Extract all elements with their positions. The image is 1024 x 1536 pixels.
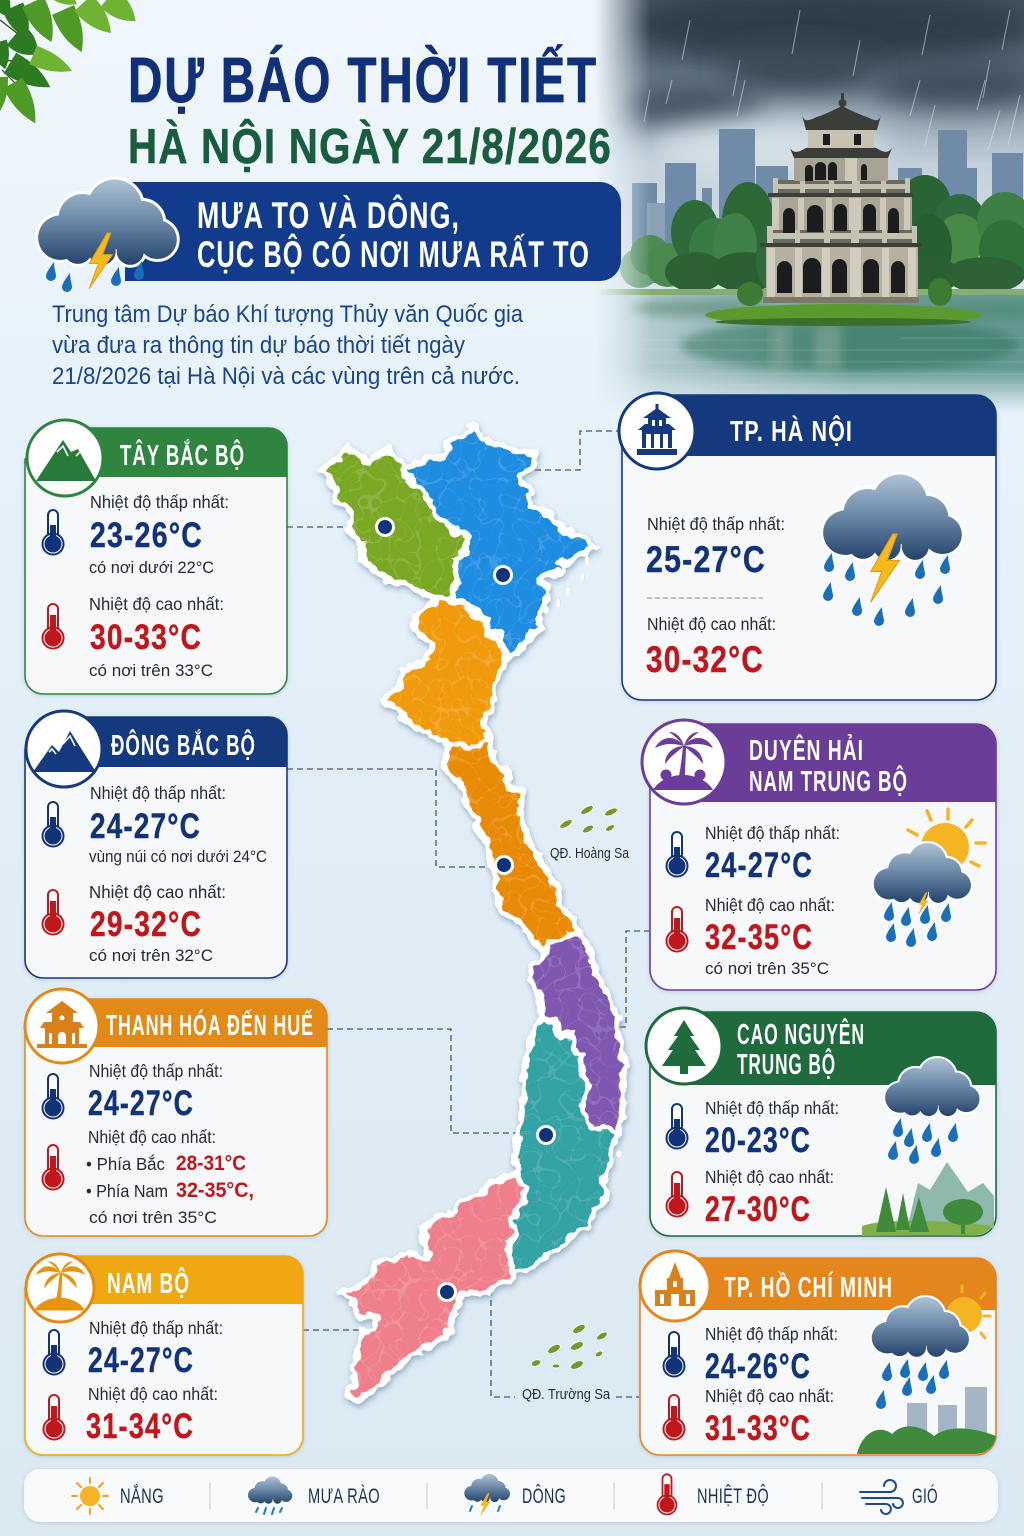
icon: palm island: [642, 720, 726, 804]
illustration: rain over highland forest: [862, 1058, 994, 1236]
low temperature: [666, 823, 840, 885]
high temperature: 32-35°C: [705, 918, 813, 957]
panel: Nam Bộ: [25, 1254, 303, 1455]
high temperature: Nhiệt độ cao nhất:: [705, 895, 835, 915]
map of Vietnam: [320, 423, 625, 1402]
panel: TP. Hồ Chí Minh: [640, 1251, 996, 1455]
high temperature: 31-34°C: [86, 1407, 194, 1446]
legend item: thunderstorm: DÔNG: [522, 1485, 566, 1508]
high temperature: 27-30°C: [705, 1190, 811, 1229]
map region: Cao nguyên Trung Bộ: [510, 1017, 617, 1273]
illustration: sun, rain cloud and city: [857, 1286, 996, 1454]
high temperature: Nhiệt độ cao nhất:: [647, 614, 776, 634]
low temperature: Nhiệt độ thấp nhất:: [89, 1061, 223, 1081]
low temperature: 24-27°C: [88, 1084, 194, 1123]
low temperature: 20-23°C: [705, 1121, 811, 1160]
legend item: showers: [248, 1476, 380, 1514]
islands: Hoàng Sa: [550, 804, 630, 862]
low temperature: [42, 1061, 223, 1123]
panel: Đông Bắc Bộ: [25, 711, 287, 978]
low temperature: 24-26°C: [705, 1347, 811, 1386]
heading: [737, 1017, 865, 1081]
heading: ĐÔNG BẮC BỘ: [111, 728, 256, 762]
high temperature: 30-33°C: [90, 618, 202, 657]
title: DỰ BÁO THỜI TIẾT: [128, 44, 598, 116]
high temperature: Nhiệt độ cao nhất:: [89, 594, 224, 614]
low temperature: Nhiệt độ thấp nhất:: [705, 1324, 838, 1344]
photo: Hoan Kiem lake and Turtle Tower under storm clouds: [598, 0, 1024, 410]
high temperature: [44, 1384, 218, 1446]
high temperature: Nhiệt độ cao nhất:: [89, 882, 226, 902]
high temperature: [666, 1167, 834, 1229]
low temperature: [646, 514, 785, 580]
high temperature: [42, 882, 226, 965]
low temperature: 23-26°C: [90, 516, 203, 555]
low temperature: 24-27°C: [88, 1341, 194, 1380]
low temperature: Nhiệt độ thấp nhất:: [90, 783, 226, 803]
island: [705, 278, 981, 326]
high temperature: [666, 895, 835, 978]
low temperature: [44, 1318, 223, 1380]
high temperature: Nhiệt độ cao nhất:: [88, 1127, 216, 1147]
low temperature: có nơi dưới 22°C: [89, 558, 214, 577]
intro text: [52, 301, 524, 390]
icon: Turtle Tower: [619, 393, 695, 469]
islands: Hoàng Sa: QĐ. Hoàng Sa: [550, 845, 630, 862]
high temperature: Nhiệt độ cao nhất:: [705, 1386, 834, 1406]
intro text: 21/8/2026 tại Hà Nội và các vùng trên cả nước.: [52, 363, 520, 390]
heading: CAO NGUYÊN: [737, 1017, 865, 1051]
low temperature: 24-27°C: [705, 846, 813, 885]
high temperature: có nơi trên 35°C: [89, 1208, 217, 1227]
connector lines: [287, 431, 650, 1397]
legend item: thunderstorm: [464, 1474, 566, 1516]
subtitle: HÀ NỘI NGÀY 21/8/2026: [128, 119, 612, 174]
high temperature: 29-32°C: [90, 905, 202, 944]
map region: Tây Bắc: [320, 448, 467, 603]
panel: Duyên hải Nam Trung Bộ: [642, 720, 996, 990]
icon: navy mountains: [26, 711, 102, 787]
low temperature: vùng núi có nơi dưới 24°C: [89, 847, 267, 866]
icon: citadel gate: [25, 989, 99, 1063]
legend item: sun: NẮNG: [120, 1484, 164, 1508]
heading: TÂY BẮC BỘ: [120, 438, 245, 472]
intro text: Trung tâm Dự báo Khí tượng Thủy văn Quốc gia: [52, 301, 524, 328]
icon: palm tree: [26, 1254, 94, 1322]
high temperature: có nơi trên 32°C: [89, 946, 213, 965]
map region: Hà Tĩnh đến Huế: [443, 741, 577, 950]
low temperature: [42, 492, 229, 577]
low temperature: Nhiệt độ thấp nhất:: [90, 492, 229, 512]
high temperature: • Phía Nam: [86, 1181, 168, 1201]
map region: Nam Bộ: [340, 1173, 527, 1402]
legend: [24, 1469, 998, 1522]
high temperature: 30-32°C: [646, 639, 764, 680]
legend item: sun: [72, 1478, 164, 1514]
high temperature: [42, 594, 224, 680]
panel: Tây Bắc Bộ: [25, 420, 287, 694]
heading: DUYÊN HẢI: [749, 733, 864, 767]
high temperature: có nơi trên 33°C: [89, 661, 213, 680]
map region: Duyên hải Nam Trung Bộ: [530, 932, 625, 1132]
map region: Đông Bắc: [403, 423, 597, 660]
icon: storm cloud: [38, 180, 177, 292]
decorative leaves, top left: [0, 0, 143, 129]
low temperature: 24-27°C: [90, 807, 201, 846]
heading: [749, 733, 908, 798]
headline banner: CỤC BỘ CÓ NƠI MƯA RẤT TO: [197, 233, 590, 275]
low temperature: Nhiệt độ thấp nhất:: [705, 823, 840, 843]
panel: TP. Hà Nội: [619, 393, 996, 700]
legend item: showers: MƯA RÀO: [308, 1485, 380, 1508]
low temperature: [42, 783, 267, 866]
low temperature: Nhiệt độ thấp nhất:: [705, 1098, 839, 1118]
high temperature: 28-31°C: [176, 1152, 246, 1175]
panel: Thanh Hóa đến Huế: [25, 989, 327, 1236]
headline banner: [125, 182, 621, 281]
low temperature: [666, 1098, 839, 1160]
high temperature: [646, 614, 776, 680]
icon: green mountains: [27, 420, 103, 496]
heading: TP. HÀ NỘI: [730, 414, 853, 448]
legend item: temperature: NHIỆT ĐỘ: [697, 1485, 769, 1508]
heading: TRUNG BỘ: [737, 1047, 836, 1081]
heading: NAM TRUNG BỘ: [749, 764, 908, 798]
high temperature: 32-35°C,: [176, 1179, 254, 1202]
islands: Trường Sa: QĐ. Trường Sa: [522, 1386, 611, 1403]
legend item: wind: [860, 1480, 938, 1514]
icon: sun and rain cloud: [874, 809, 985, 947]
legend item: wind: GIÓ: [912, 1485, 938, 1508]
high temperature: [664, 1386, 834, 1448]
high temperature: Nhiệt độ cao nhất:: [88, 1384, 218, 1404]
high temperature: Nhiệt độ cao nhất:: [705, 1167, 834, 1187]
panel: Cao nguyên Trung Bộ: [646, 1008, 996, 1236]
low temperature: Nhiệt độ thấp nhất:: [647, 514, 785, 534]
tower: [760, 93, 922, 303]
low temperature: [664, 1324, 838, 1386]
high temperature: [42, 1127, 254, 1227]
high temperature: có nơi trên 35°C: [705, 959, 829, 978]
heading: THANH HÓA ĐẾN HUẾ: [106, 1008, 314, 1042]
icon: thunderstorm: [823, 474, 962, 626]
map region: Thanh Hóa – Nghệ An: [382, 598, 505, 748]
map markers: [376, 518, 554, 1300]
icon: Notre Dame / city hall: [640, 1251, 710, 1321]
icon: pine tree: [646, 1008, 722, 1084]
intro text: vừa đưa ra thông tin dự báo thời tiết ngày: [52, 332, 465, 359]
islands: Trường Sa: [522, 1322, 611, 1403]
headline banner: MƯA TO VÀ DÔNG,: [197, 194, 460, 236]
heading: TP. HỒ CHÍ MINH: [724, 1270, 893, 1304]
coastal islets: [543, 556, 622, 1158]
low temperature: 25-27°C: [646, 539, 766, 580]
low temperature: Nhiệt độ thấp nhất:: [89, 1318, 223, 1338]
high temperature: • Phía Bắc: [86, 1153, 165, 1174]
heading: NAM BỘ: [107, 1266, 190, 1300]
legend item: temperature: [658, 1474, 769, 1514]
high temperature: 31-33°C: [705, 1409, 811, 1448]
